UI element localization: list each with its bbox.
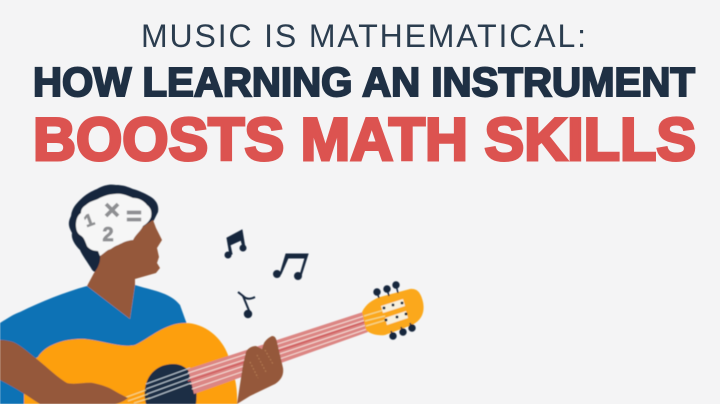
bridge strings over body xyxy=(124,390,150,403)
headstock strings xyxy=(364,310,386,326)
equals sign: = xyxy=(126,201,142,231)
title line 3: BOOSTS MATH SKILLS xyxy=(33,106,696,173)
strings xyxy=(188,316,367,389)
neck centre stripe xyxy=(188,322,365,381)
finger lines xyxy=(250,350,273,378)
illustration: guitarist xyxy=(0,185,424,404)
title line 2: HOW LEARNING AN INSTRUMENT xyxy=(33,59,695,105)
sound hole xyxy=(145,364,197,404)
multiply sign: × xyxy=(104,195,120,225)
title xyxy=(33,18,696,173)
strings over sound hole xyxy=(146,368,191,399)
guitar body xyxy=(24,323,237,404)
math symbols xyxy=(81,195,142,246)
upper tuner plate xyxy=(381,299,405,313)
fretting hand xyxy=(237,336,283,404)
tuner pegs xyxy=(374,282,415,339)
digit 1: 1 xyxy=(81,210,97,231)
headstock xyxy=(362,289,424,335)
music note 1 xyxy=(225,230,246,258)
music note 2 xyxy=(274,254,308,280)
neck and face xyxy=(87,220,162,319)
guitar neck xyxy=(188,312,368,394)
music note 3 xyxy=(238,292,255,318)
shirt xyxy=(0,285,189,404)
hair xyxy=(69,185,158,272)
strumming arm xyxy=(0,340,128,404)
title line 1: MUSIC IS MATHEMATICAL: xyxy=(141,18,586,54)
brain xyxy=(76,194,151,256)
lower tuner plate xyxy=(385,311,408,325)
digit 2: 2 xyxy=(102,224,114,246)
